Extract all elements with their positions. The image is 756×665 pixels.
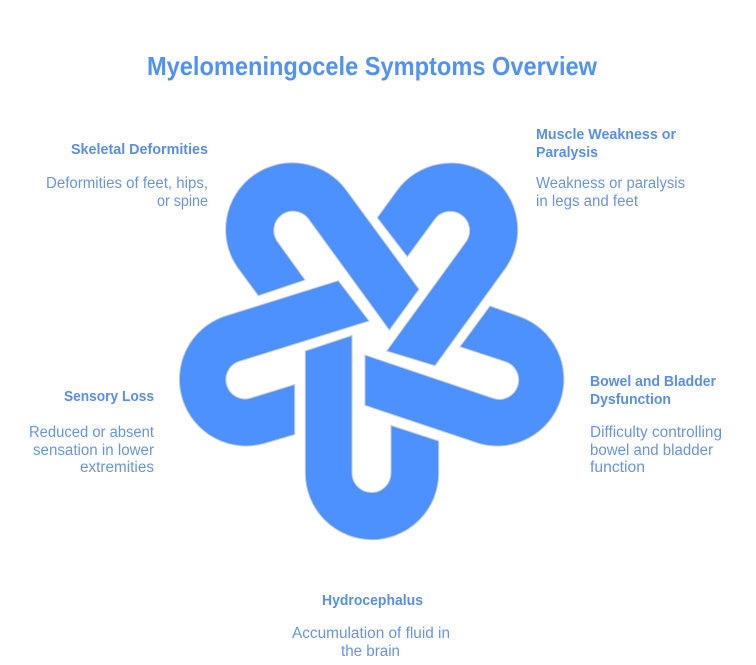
text block: muscle weakness: Paralysis bbox=[536, 144, 598, 161]
text block: hydrocephalus: the brain bbox=[341, 643, 400, 660]
text block: sensory loss: Sensory Loss bbox=[64, 388, 154, 405]
text block: hydrocephalus bbox=[292, 592, 450, 660]
knot diagram bbox=[179, 163, 564, 540]
text block: bowel and bladder: Bowel and Bladder bbox=[590, 373, 716, 390]
text block: bowel and bladder: function bbox=[590, 459, 645, 476]
text block: sensory loss bbox=[29, 388, 155, 476]
shape: skeletal deformities loop bbox=[226, 163, 419, 330]
text block: hydrocephalus: Hydrocephalus bbox=[322, 592, 423, 609]
shape: bowel and bladder loop bbox=[365, 306, 564, 446]
text block: bowel and bladder bbox=[590, 373, 722, 476]
text block: muscle weakness: in legs and feet bbox=[536, 193, 639, 210]
text block: bowel and bladder: Difficulty controlling bbox=[590, 424, 722, 441]
title: Myelomeningocele Symptoms Overview bbox=[147, 51, 598, 81]
text block: hydrocephalus: Accumulation of fluid in bbox=[292, 625, 450, 642]
text block: skeletal deformities: Skeletal Deformities bbox=[71, 141, 208, 158]
shape: muscle weakness loop bbox=[377, 163, 518, 366]
text block: skeletal deformities: or spine bbox=[157, 193, 208, 210]
text block: muscle weakness: Weakness or paralysis bbox=[536, 175, 685, 192]
shape: sensory loss loop bbox=[179, 281, 369, 446]
text block: skeletal deformities bbox=[46, 141, 208, 210]
text block: skeletal deformities: Deformities of feet, hips, bbox=[46, 175, 208, 192]
text block: muscle weakness: Muscle Weakness or bbox=[536, 126, 676, 143]
text block: sensory loss: extremities bbox=[80, 459, 154, 476]
text block: sensory loss: sensation in lower bbox=[33, 442, 154, 459]
text block: muscle weakness bbox=[536, 126, 685, 210]
text block: bowel and bladder: Dysfunction bbox=[590, 391, 671, 408]
text block: bowel and bladder: bowel and bladder bbox=[590, 442, 713, 459]
text block: sensory loss: Reduced or absent bbox=[29, 424, 155, 441]
shape: hydrocephalus loop bbox=[305, 336, 439, 540]
